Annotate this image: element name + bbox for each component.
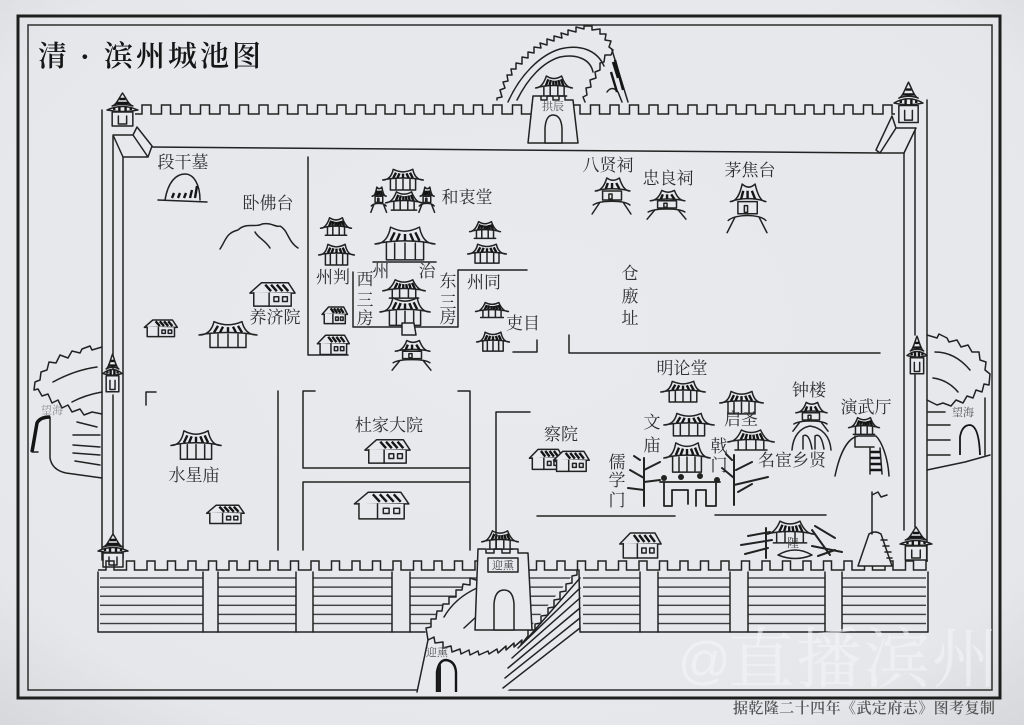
corner tower SW — [98, 534, 128, 567]
east wall lines — [904, 100, 927, 560]
granary site label 仓廒址: 址 — [622, 309, 638, 328]
bell tower 钟楼 — [792, 381, 831, 450]
hospice 养济院: 养济院 — [250, 308, 300, 327]
east offices 州同 吏目 — [467, 222, 540, 351]
east barbican: 望海 — [952, 405, 974, 419]
memorial gate — [660, 473, 720, 506]
drill hall 演武厅: 演武厅 — [840, 398, 892, 417]
house south of compound — [354, 492, 409, 519]
label 儒学门: 学 — [608, 471, 626, 490]
south gate tower 迎熏 — [475, 531, 532, 630]
granary site label 仓廒址: 廒 — [622, 287, 638, 306]
compound 杜家大院: 杜家大院 — [355, 416, 423, 435]
west barbican — [32, 346, 102, 478]
temple 城隍 with trees — [741, 521, 842, 558]
hospice 养济院 — [250, 283, 300, 327]
house by south wall — [620, 533, 661, 558]
terrace 茅焦台: 茅焦台 — [724, 161, 776, 180]
shrine 八贤祠 — [582, 156, 634, 214]
south wall face — [98, 572, 928, 632]
main hall 州治: 州 — [372, 262, 390, 281]
source caption: 据乾隆二十四年《武定府志》图考复制 — [733, 699, 995, 717]
watermark: 直播滨州 — [728, 624, 1000, 697]
granary site label 仓廒址 — [622, 264, 638, 328]
tomb 段干墓: 段干墓 — [158, 153, 208, 172]
gate label 戟门: 门 — [710, 456, 728, 475]
temple 文庙 — [644, 413, 714, 472]
corner tower SE — [900, 527, 932, 560]
temple 城隍 with trees: 隍 — [787, 536, 799, 550]
temple 水星庙: 水星庙 — [168, 466, 220, 485]
gate label 戟门 — [710, 437, 728, 475]
west offices 州判: 州判 — [316, 268, 350, 287]
north city wall battlements — [135, 103, 895, 117]
office 察院 — [529, 425, 589, 471]
shrine 忠良祠: 忠良祠 — [642, 169, 694, 188]
east barbican — [927, 334, 990, 470]
side tower east — [907, 336, 927, 374]
side tower west — [103, 354, 122, 392]
compound 和衷堂: 和衷堂 — [442, 188, 492, 207]
side rooms 东三房 — [440, 272, 456, 327]
hill 卧佛台: 卧佛台 — [242, 193, 294, 213]
south gate tower 迎熏: 迎熏 — [492, 558, 514, 572]
title: 滨州城池图 — [104, 40, 264, 73]
south wall battlements — [98, 559, 928, 572]
watermark: @ — [678, 632, 731, 690]
drill hall 演武厅 — [835, 398, 892, 476]
temple 文庙: 庙 — [644, 436, 660, 455]
hill 卧佛台 — [220, 193, 298, 249]
side rooms 东三房: 房 — [440, 308, 456, 327]
west wall lines — [102, 110, 123, 560]
west barbican: 望海 — [41, 403, 63, 417]
title: 清 · — [38, 41, 93, 73]
small house southwest — [207, 505, 244, 524]
side rooms 东三房: 三 — [440, 293, 456, 312]
house west large — [199, 322, 257, 348]
main hall 州治: 治 — [418, 262, 436, 281]
corner tower NE — [894, 82, 923, 123]
label 儒学门: 门 — [608, 491, 626, 510]
temple 水星庙 — [168, 431, 221, 485]
tree right — [722, 454, 768, 505]
terrace 茅焦台 — [724, 161, 776, 233]
south gate barbican — [417, 570, 580, 692]
tree left — [628, 456, 660, 506]
side rooms 西三房: 房 — [356, 309, 374, 328]
compound 杜家大院 — [355, 416, 423, 463]
inner north wall line — [150, 147, 880, 153]
office 察院: 察院 — [544, 425, 578, 444]
west offices 州判 — [316, 218, 354, 354]
side rooms 西三房 — [356, 270, 374, 328]
shrine 启圣 — [720, 391, 774, 450]
label 儒学门: 儒 — [608, 453, 626, 472]
NE corner ramp — [876, 116, 916, 153]
bell tower 钟楼: 钟楼 — [792, 381, 827, 400]
label 名宦乡贤: 名宦乡贤 — [758, 451, 827, 470]
corner tower NW — [107, 93, 138, 126]
shrine 忠良祠 — [642, 169, 694, 219]
shrine 启圣: 启圣 — [724, 410, 758, 429]
main hall 州治 — [372, 227, 436, 370]
road lines — [146, 157, 880, 550]
compound 和衷堂 — [371, 169, 492, 212]
south gate barbican: 迎熏 — [426, 645, 448, 659]
east offices 州同 吏目: 州同 — [467, 273, 501, 292]
shrine 八贤祠: 八贤祠 — [582, 156, 634, 175]
tomb 段干墓 — [158, 153, 208, 202]
north gate tower 拱辰: 拱辰 — [542, 99, 564, 113]
small house west — [144, 320, 177, 337]
granary site label 仓廒址: 仓 — [622, 264, 638, 283]
flag mound — [858, 492, 892, 566]
side rooms 西三房: 西 — [356, 270, 374, 289]
gate label 戟门: 戟 — [710, 437, 728, 456]
NW corner ramp — [113, 127, 152, 157]
temple 文庙: 文 — [644, 413, 660, 432]
label 儒学门 — [608, 453, 626, 510]
east offices 州同 吏目: 吏目 — [506, 314, 540, 333]
school 明论堂 — [656, 359, 708, 402]
north gate barbican — [497, 26, 628, 102]
side rooms 东三房: 东 — [440, 272, 456, 291]
side rooms 西三房: 三 — [356, 291, 374, 310]
north gate tower 拱辰 — [528, 76, 578, 143]
school 明论堂: 明论堂 — [656, 359, 708, 378]
